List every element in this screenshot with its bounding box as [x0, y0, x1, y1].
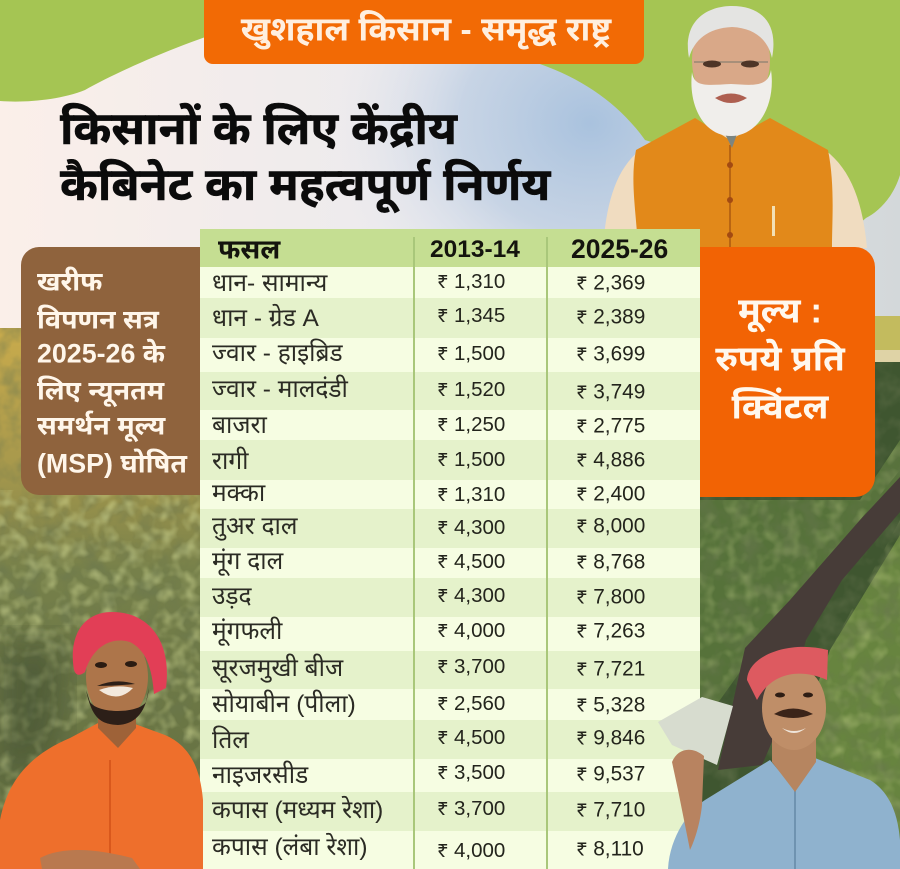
table: MSP by crop: ₹ 4,300: [437, 584, 505, 607]
banner: [204, 0, 644, 64]
side panel: price unit: क्विंटल: [732, 388, 828, 426]
side panel: kharif MSP: 2025-26 के: [37, 339, 165, 369]
table: MSP by crop: ₹ 2,400: [576, 483, 645, 506]
title: [60, 102, 552, 214]
table: MSP by crop: तिल: [212, 727, 249, 754]
table: MSP by crop: ₹ 4,000: [437, 619, 505, 642]
table: MSP by crop: तुअर दाल: [212, 513, 297, 540]
table: MSP by crop: ₹ 3,700: [437, 797, 505, 820]
table: MSP by crop: ₹ 2,369: [576, 272, 645, 295]
table: MSP by crop: ₹ 2,389: [576, 306, 645, 329]
table: MSP by crop: बाजरा: [212, 412, 267, 439]
table: MSP by crop: ₹ 5,328: [576, 694, 645, 717]
row: मूंग दाल: [212, 548, 645, 576]
table: MSP by crop: मक्का: [212, 480, 265, 507]
table: MSP by crop: ₹ 7,263: [576, 620, 645, 643]
row: तिल: [212, 726, 645, 754]
row: कपास (लंबा रेशा): [212, 832, 644, 862]
side panel: kharif MSP: विपणन सत्र: [37, 305, 159, 335]
side panel: kharif MSP: [21, 247, 211, 495]
table: MSP by crop: रागी: [212, 448, 249, 475]
row: रागी: [212, 446, 645, 475]
row: ज्वार मालदंडी: [212, 374, 645, 404]
table: MSP by crop: ₹ 4,500: [437, 550, 505, 573]
row: नाइजरसीड: [212, 760, 645, 789]
table: MSP by crop: ₹ 1,310: [437, 483, 505, 506]
table: MSP by crop: ₹ 8,768: [576, 551, 645, 574]
table: MSP by crop: ₹ 3,749: [576, 381, 645, 404]
table: MSP by crop: ₹ 1,310: [437, 270, 505, 293]
table: MSP by crop: ₹ 1,500: [437, 342, 505, 365]
table: MSP by crop: ₹ 8,110: [576, 838, 644, 861]
table: MSP by crop: ₹ 1,250: [437, 413, 505, 436]
table: MSP by crop: मूंग दाल: [212, 548, 283, 575]
table: MSP by crop: ₹ 3,500: [437, 761, 505, 784]
row: उड़द: [212, 583, 645, 610]
row: बाजरा: [212, 412, 645, 439]
table: MSP by crop: ₹ 3,699: [576, 343, 645, 366]
table: MSP by crop: ₹ 7,800: [576, 586, 645, 609]
row: सूरजमुखी बीज: [212, 654, 645, 683]
side panel: kharif MSP: (MSP) घोषित: [37, 449, 187, 479]
table: MSP by crop: धान - ग्रेड A: [212, 305, 319, 332]
table: MSP by crop: ₹ 1,345: [437, 304, 505, 327]
banner text: खुशहाल किसान - समृद्ध राष्ट्र: [241, 11, 611, 48]
table: MSP by crop: ₹ 7,710: [576, 799, 645, 822]
side panel: kharif MSP: समर्थन मूल्य: [37, 411, 165, 441]
row: कपास (मध्यम रेशा): [212, 796, 645, 824]
row: तुअर दाल: [212, 513, 645, 541]
table header: फसल: [218, 234, 280, 264]
table: MSP by crop: ₹ 8,000: [576, 515, 645, 538]
table: MSP by crop: कपास (मध्यम रेशा): [212, 797, 383, 824]
table: MSP by crop: सूरजमुखी बीज: [212, 655, 343, 682]
table: MSP by crop: ₹ 9,537: [576, 763, 645, 786]
row: ज्वार हाइब्रिड: [212, 338, 645, 367]
row: मक्का: [212, 480, 645, 507]
side panel: price unit: रुपये प्रति: [715, 340, 845, 378]
table: MSP by crop: ₹ 1,500: [437, 448, 505, 471]
table: MSP by crop: नाइजरसीड: [212, 762, 308, 789]
table: MSP by crop: कपास (लंबा रेशा): [212, 834, 368, 861]
table: MSP by crop: ₹ 4,886: [576, 449, 645, 472]
row: धान ग्रेड A: [212, 304, 645, 332]
row: मूंगफली: [212, 616, 645, 646]
row: सोयाबीन (पीला): [212, 690, 645, 718]
title: कैबिनेट का महत्वपूर्ण निर्णय: [60, 159, 550, 210]
side panel: kharif MSP: खरीफ: [37, 267, 102, 297]
table: MSP by crop: ज्वार - हाइब्रिड: [212, 340, 343, 367]
table: MSP by crop: उड़द: [212, 583, 252, 610]
table: MSP by crop: सोयाबीन (पीला): [212, 691, 356, 718]
table: MSP by crop: ₹ 4,300: [437, 516, 505, 539]
table: MSP by crop: मूंगफली: [212, 618, 282, 645]
side panel: price unit: [690, 247, 875, 497]
table: MSP by crop: ₹ 2,775: [576, 415, 645, 438]
side panel: kharif MSP: लिए न्यूनतम: [37, 376, 164, 406]
table: MSP by crop: ₹ 1,520: [437, 378, 505, 401]
table: MSP by crop: ज्वार - मालदंडी: [212, 376, 348, 403]
row: धान सामान्य: [212, 270, 645, 297]
table header: 2025-26: [571, 234, 668, 264]
table: MSP by crop: ₹ 2,560: [437, 692, 505, 715]
table: MSP by crop: ₹ 3,700: [437, 655, 505, 678]
table: MSP by crop: ₹ 4,500: [437, 726, 505, 749]
table: MSP by crop: धान- सामान्य: [212, 270, 327, 297]
side panel: price unit: मूल्य :: [738, 292, 822, 330]
table: MSP by crop: ₹ 7,721: [576, 658, 645, 681]
title: किसानों के लिए केंद्रीय: [60, 103, 457, 154]
table: MSP by crop: ₹ 4,000: [437, 839, 505, 862]
table header: [218, 234, 668, 264]
table: MSP by crop: ₹ 9,846: [576, 727, 645, 750]
table header: 2013-14: [430, 236, 520, 263]
